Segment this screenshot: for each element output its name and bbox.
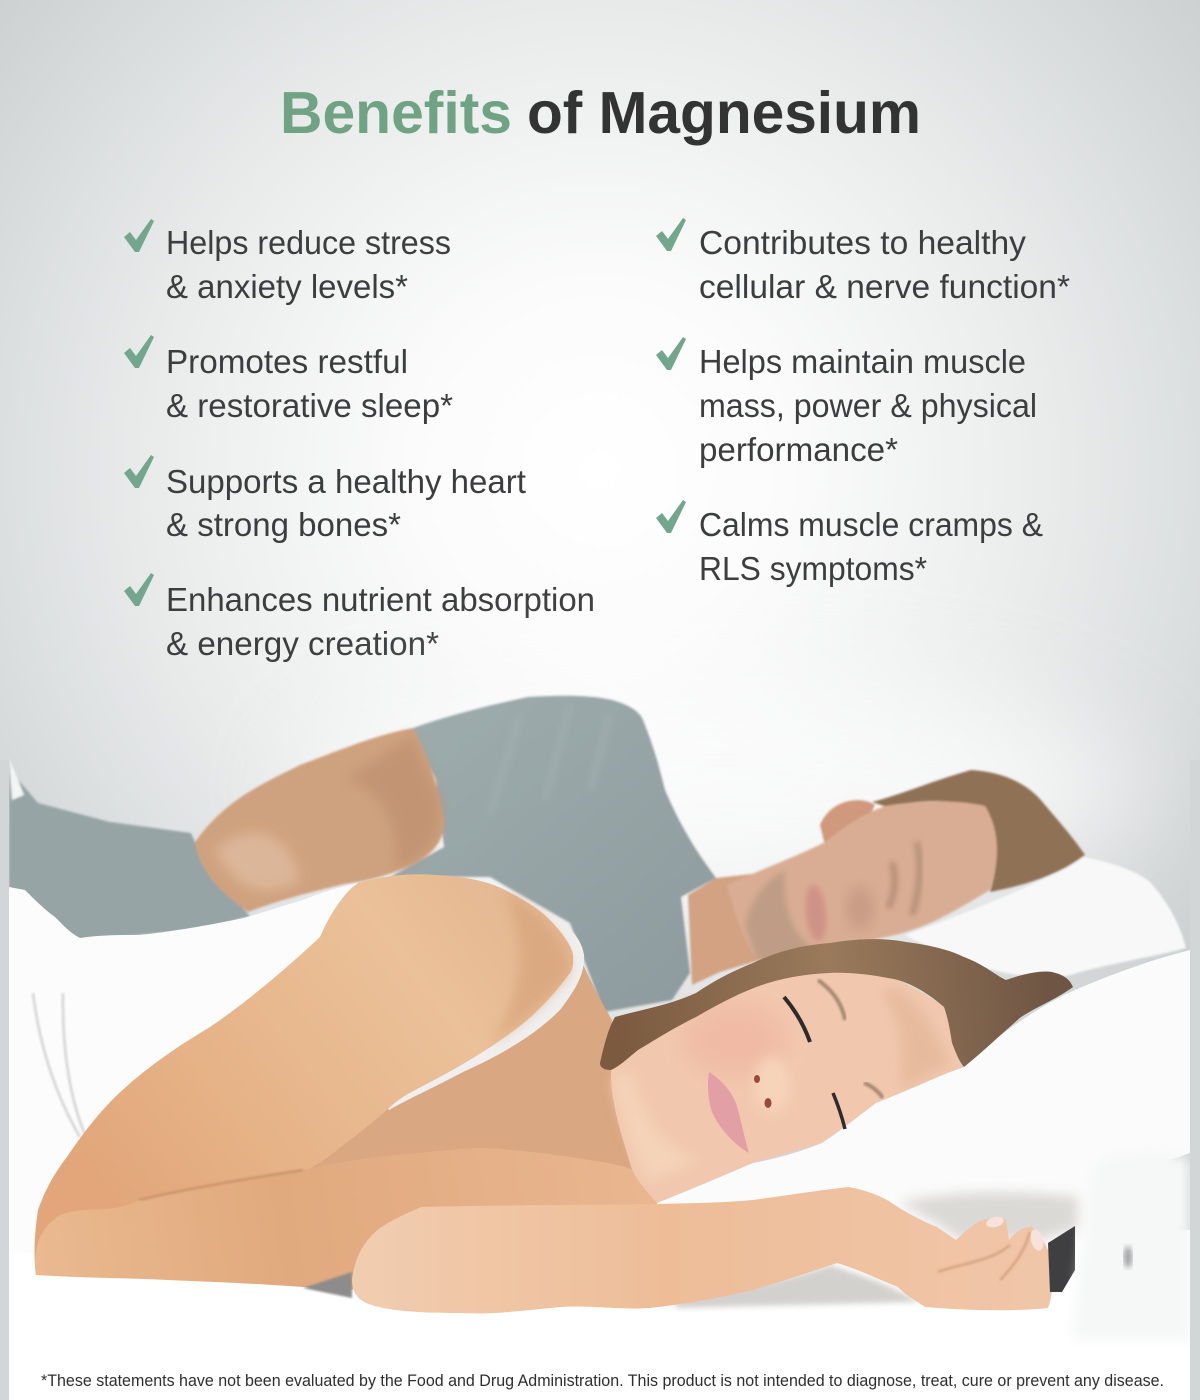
benefit: cramps: RLS symptoms* [699, 550, 927, 587]
benefits list: left column [124, 219, 595, 662]
woman's fingernails [985, 1215, 1046, 1252]
benefit: cramps [656, 500, 1043, 587]
benefit: absorption: Enhances nutrient absorption [166, 581, 595, 618]
man's arm shading [345, 735, 441, 870]
benefit: stress [124, 219, 451, 305]
bed shadow under arm [303, 1272, 352, 1298]
benefit: sleep: & restorative sleep* [166, 387, 453, 424]
woman's lips [708, 1072, 749, 1153]
woman's hairline shading [880, 990, 950, 1090]
woman's near arm [352, 1187, 1053, 1313]
sheet sliver at far left [9, 758, 24, 800]
benefit: cellular [656, 218, 1070, 305]
right photo margin [1190, 760, 1200, 1400]
blurred alarm clock [1072, 1152, 1190, 1340]
woman's eyelash bottom [833, 1093, 845, 1129]
man's arm highlight [215, 833, 300, 890]
benefits list: right column [656, 218, 1070, 587]
woman's forearm [35, 1148, 660, 1290]
man's lips [803, 884, 829, 942]
footnote disclaimer: *These statements have not been evaluated by the Food and Drug Administration. This product is not intended to diagnose, treat, cure or prevent any disease. [41, 1371, 1164, 1390]
man's face [727, 802, 997, 960]
woman's cheek blush [683, 1004, 787, 1076]
man [9, 696, 1186, 1012]
benefit: muscle mass [656, 337, 1037, 468]
man's shirt, sleeve and torso [390, 696, 716, 1012]
woman's strap [380, 917, 584, 1110]
man's shirt, waist [9, 760, 250, 940]
dark bedside object [1048, 1226, 1075, 1292]
man's neck and chest [688, 872, 790, 985]
left photo margin [0, 760, 9, 1400]
title: of Magnesium [527, 80, 921, 146]
benefit: cramps: Calms muscle cramps & [699, 506, 1043, 543]
woman's arm crease [139, 1170, 303, 1200]
woman's top [9, 883, 400, 1254]
benefit: cellular: Contributes to healthy [699, 224, 1027, 261]
woman's face [611, 973, 964, 1203]
woman's eyelash top [784, 997, 810, 1042]
man's hair [872, 770, 1085, 892]
photo: couple sleeping in bed [9, 680, 1190, 1400]
benefit: absorption [124, 573, 595, 662]
woman [9, 874, 1190, 1313]
benefit: heart and bones [124, 455, 526, 543]
woman's nostrils [754, 1075, 772, 1108]
man's eye and brow [888, 842, 920, 915]
benefit: muscle mass: performance* [699, 431, 898, 468]
woman's top folds [33, 993, 86, 1137]
man's ear [820, 800, 875, 845]
title [280, 80, 921, 146]
woman's hair [600, 939, 1073, 1070]
title: Benefits [280, 80, 512, 146]
benefit: sleep: Promotes restful [166, 343, 408, 380]
benefit: sleep [124, 335, 453, 424]
benefit: stress: & anxiety levels* [166, 268, 408, 305]
man's beard shadow [745, 870, 815, 961]
woman's pillow [657, 950, 1190, 1310]
woman's neck shading [612, 1070, 700, 1180]
woman's hand fingers [938, 1232, 1030, 1280]
benefit: heart and bones: Supports a healthy heart [166, 463, 526, 500]
woman's eyebrow top [818, 980, 845, 1020]
man's nose shadow [846, 886, 874, 930]
benefit: muscle mass: Helps maintain muscle [699, 343, 1026, 380]
photo backdrop glow [300, 680, 1140, 900]
benefit: absorption: & energy creation* [166, 625, 439, 662]
man's pillow [905, 857, 1186, 977]
man's shirt folds [490, 705, 610, 815]
woman's upper arm [35, 874, 573, 1275]
pillow shadow below arm [676, 1265, 920, 1308]
benefit: muscle mass: mass, power & physical [699, 387, 1037, 424]
woman's shoulder edge shading [490, 890, 570, 1045]
man's arm [195, 728, 444, 912]
alarm clock dark spot [1124, 1246, 1132, 1268]
woman's eyebrow bottom [864, 1083, 883, 1098]
benefit: cellular: cellular & nerve function* [699, 268, 1070, 305]
benefit: heart and bones: & strong bones* [166, 506, 401, 543]
woman's pillow gray folds [898, 1192, 1078, 1240]
bed [9, 1230, 1190, 1400]
woman's chest and neck [300, 950, 660, 1205]
benefit: stress: Helps reduce stress [166, 224, 451, 261]
woman's nose [754, 1057, 790, 1113]
